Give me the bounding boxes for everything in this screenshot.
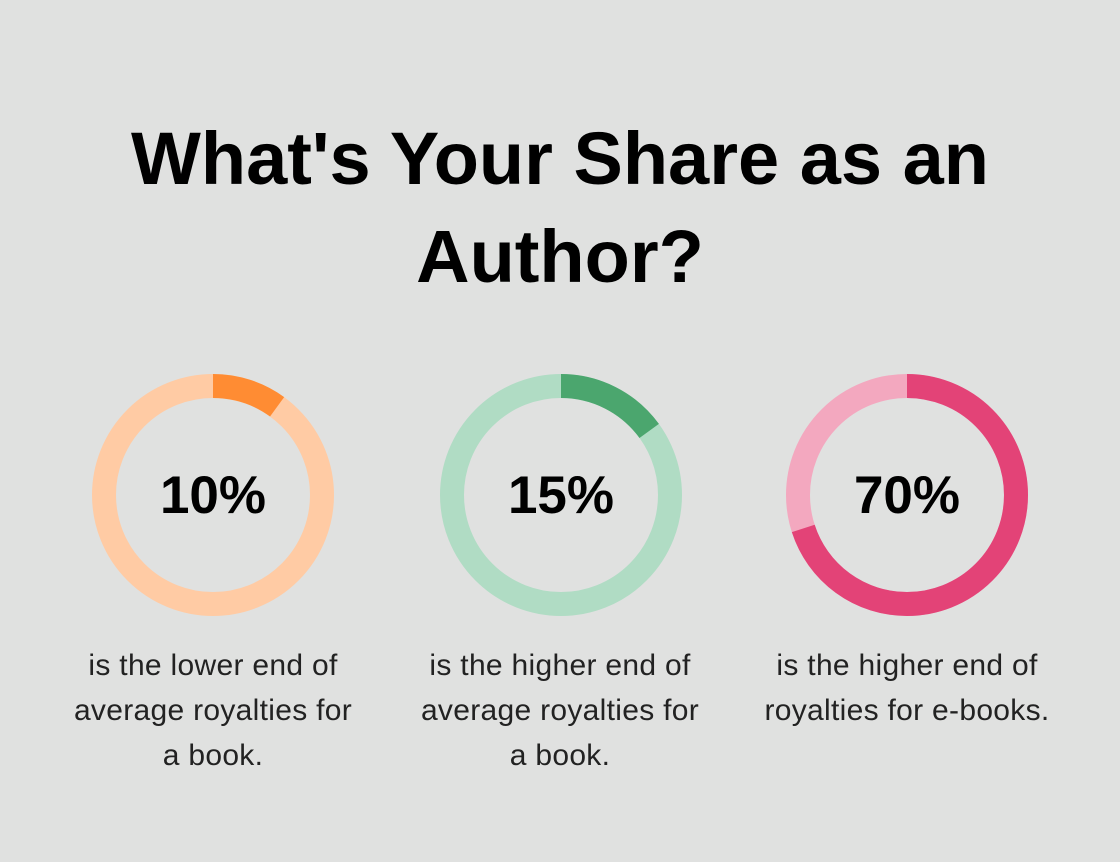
caption: 70%: is the higher end of royalties for e-books. [764, 649, 1050, 727]
title: What's Your Share as an [131, 117, 989, 200]
donut: 70%: 70% [854, 466, 960, 525]
caption: 15%: is the higher end of average royalties for a book. [421, 649, 699, 772]
donut: 15% [440, 374, 682, 616]
donut: 10%: 10% [160, 466, 266, 525]
donut: 70% [786, 374, 1028, 616]
donut: 10% [92, 374, 334, 616]
donut: 15%: 15% [508, 466, 614, 525]
title [131, 117, 989, 298]
title: Author? [416, 215, 704, 298]
caption: 10%: is the lower end of average royalties for a book. [74, 649, 352, 772]
